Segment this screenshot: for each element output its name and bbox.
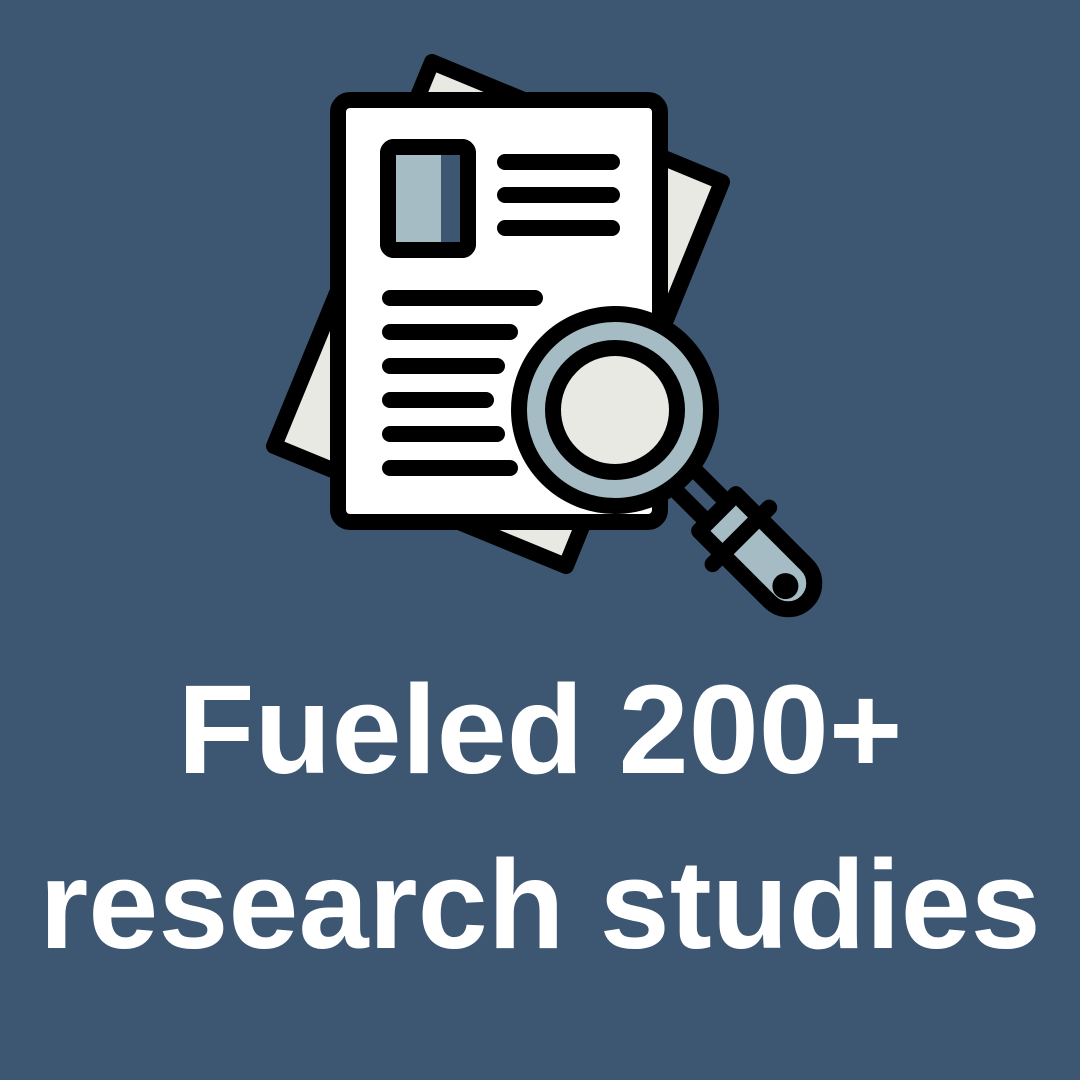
front paper [338, 100, 660, 522]
magnifier lens [519, 314, 711, 506]
icon: documents with magnifier [266, 54, 822, 618]
text lines [390, 162, 612, 468]
title line 2: research studies [39, 834, 1041, 975]
magnifier handle [655, 450, 835, 630]
title line 1: Fueled 200+ [178, 659, 902, 800]
image box [388, 147, 468, 250]
back paper [274, 62, 722, 566]
